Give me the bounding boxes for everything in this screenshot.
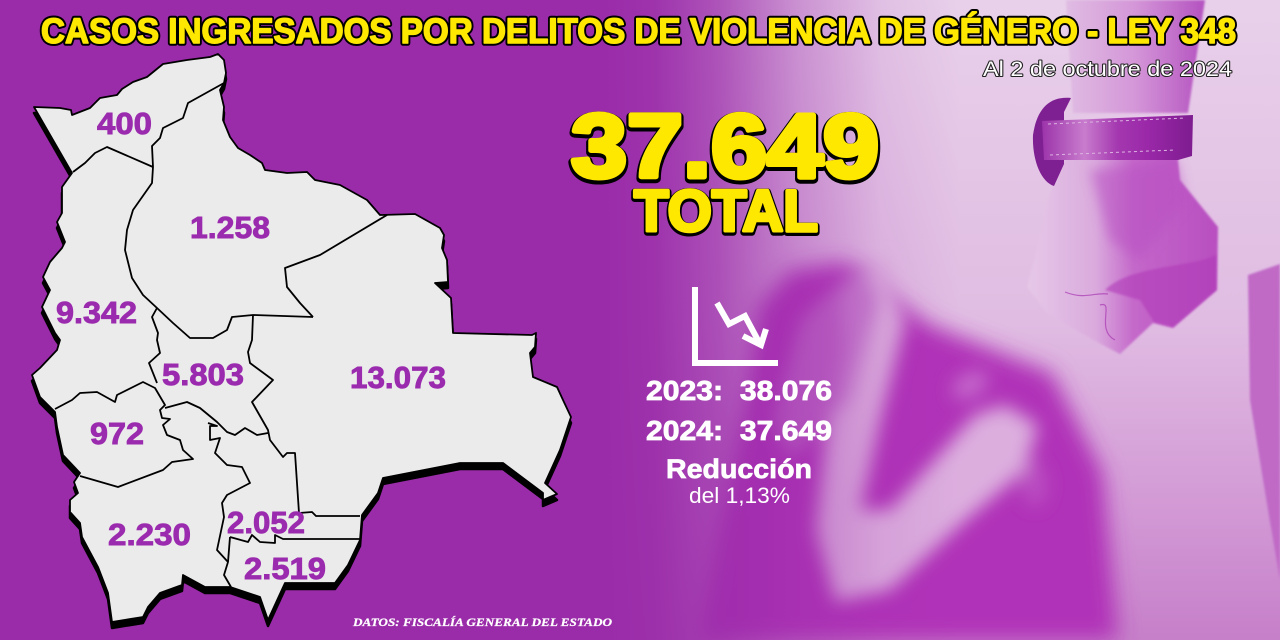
value: Potosí: 2.230 (108, 517, 191, 552)
title: CASOS INGRESADOS POR DELITOS DE VIOLENCIA DE GÉNERO - LEY 348 (41, 11, 1236, 51)
photo: man's fist over a crouching person (600, 0, 1280, 640)
department borders (55, 83, 387, 587)
total number: 37.649 (571, 99, 879, 199)
man's sleeve (1248, 264, 1280, 580)
total number: 37.649 (571, 97, 879, 197)
map of Bolivia (32, 54, 571, 628)
watch and strap (1033, 98, 1193, 186)
man's forearm and fist (1027, 0, 1218, 354)
value: Beni: 1.258 (190, 210, 270, 245)
value: Tarija: 2.519 (244, 551, 326, 586)
stat: 2024: 2024: 37.649 (646, 415, 832, 446)
value: Cochabamba: 5.803 (162, 357, 244, 392)
department values (56, 106, 446, 586)
date subtitle: Al 2 de octubre de 2024 (983, 58, 1232, 81)
total figure (571, 97, 879, 246)
value: La Paz: 9.342 (56, 295, 137, 330)
stat: 2023: 2023: 38.076 (646, 375, 832, 406)
source: DATOS: FISCALÍA GENERAL DEL ESTADO (352, 615, 612, 629)
reduction label: Reducción (666, 454, 812, 484)
comparison stats (646, 375, 832, 508)
map land (32, 54, 571, 622)
value: Oruro: 972 (90, 416, 144, 451)
map shadow (32, 60, 571, 628)
title: CASOS INGRESADOS POR DELITOS DE VIOLENCIA DE GÉNERO - LEY 348 (41, 11, 1236, 51)
reduction value: del 1,13% (689, 483, 790, 508)
value: Pando: 400 (97, 106, 152, 141)
icon: declining chart (695, 287, 778, 363)
total label: TOTAL (634, 180, 818, 246)
value: Santa Cruz: 13.073 (350, 360, 446, 395)
date subtitle: Al 2 de octubre de 2024 (983, 58, 1232, 81)
value: Chuquisaca: 2.052 (227, 505, 305, 540)
total label: TOTAL (634, 179, 818, 244)
